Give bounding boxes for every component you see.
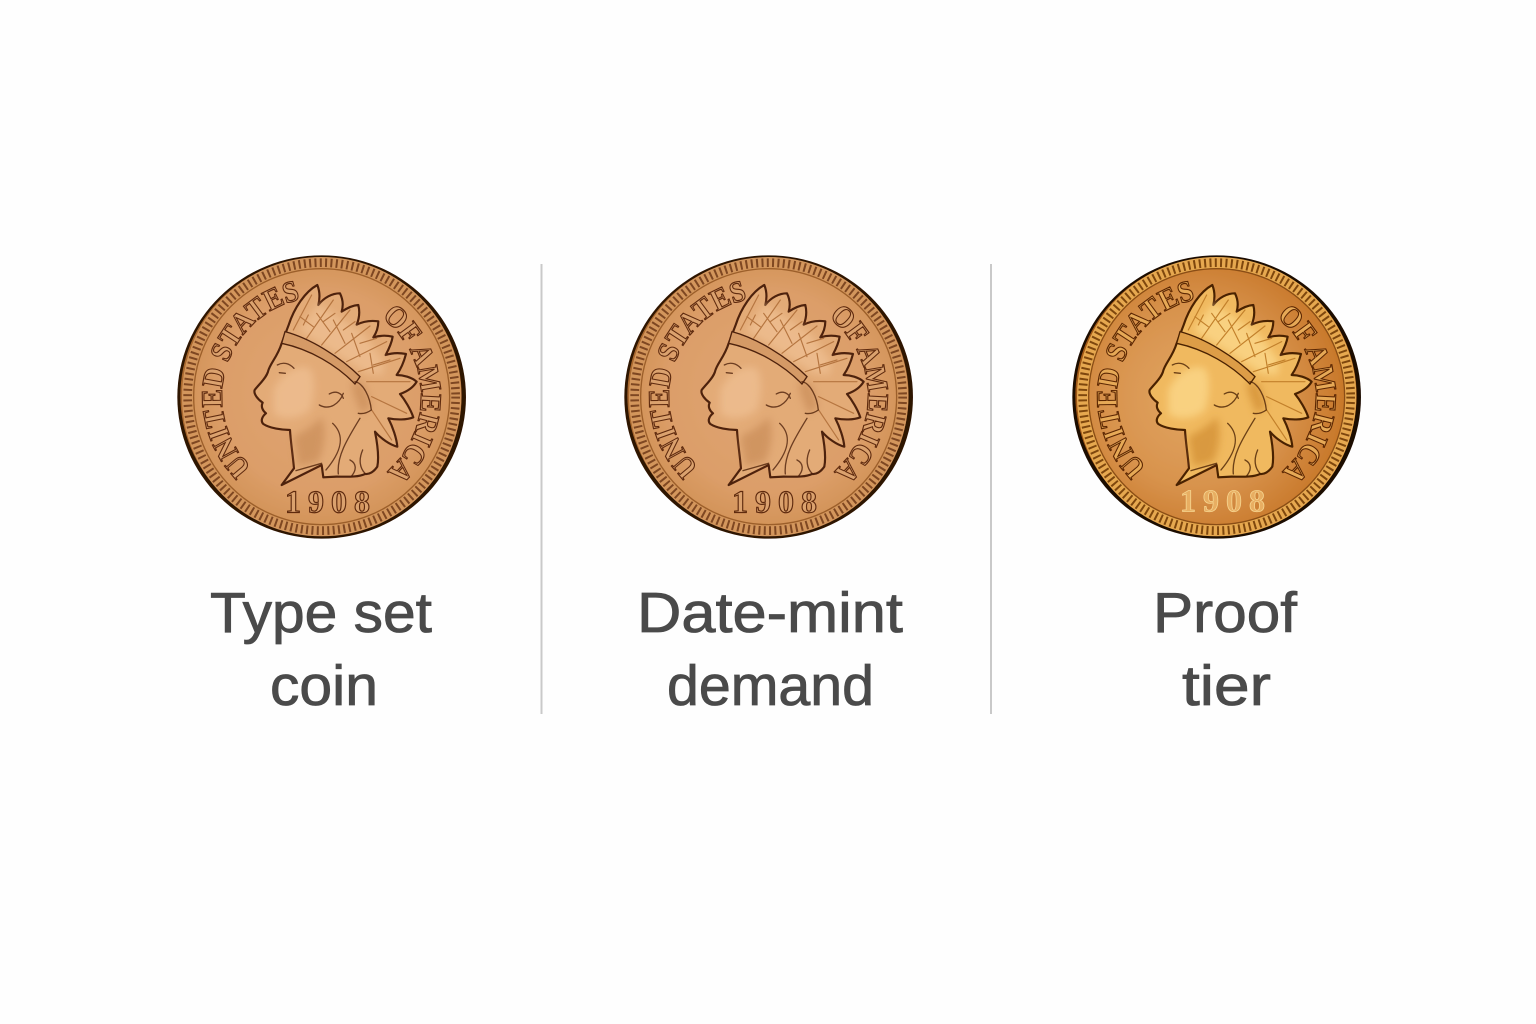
legend: united states: UNITED STATES [202, 280, 299, 481]
divider right [990, 264, 992, 714]
panel: proof tier [1072, 255, 1361, 718]
label: type set coin [210, 581, 432, 718]
label: date-mint demand: Date-mint [637, 581, 903, 645]
label: type set coin: coin [270, 654, 378, 718]
legend: of america: OF AMERICA [832, 306, 888, 480]
coin: 1908 proof cent [1072, 255, 1361, 539]
panel: type set coin [177, 255, 466, 718]
date: 1908 [1180, 483, 1265, 519]
label: date-mint demand [637, 581, 903, 718]
label: type set coin: Type set [210, 581, 432, 645]
legend: of america: OF AMERICA [386, 306, 442, 480]
label: proof tier [1153, 581, 1297, 718]
label: proof tier: tier [1182, 654, 1271, 718]
divider left [540, 264, 542, 714]
date: 1908 [732, 484, 817, 520]
coin: 1908 date-mint cent [624, 255, 913, 539]
label: date-mint demand: demand [667, 654, 874, 718]
legend: of america: OF AMERICA [1280, 306, 1336, 480]
coin: 1908 type set cent [177, 255, 466, 539]
date: 1908 [285, 484, 370, 520]
label: proof tier: Proof [1153, 581, 1297, 645]
legend: united states: UNITED STATES [1096, 280, 1194, 481]
legend: united states: UNITED STATES [648, 280, 746, 481]
panel: date-mint demand [624, 255, 913, 718]
